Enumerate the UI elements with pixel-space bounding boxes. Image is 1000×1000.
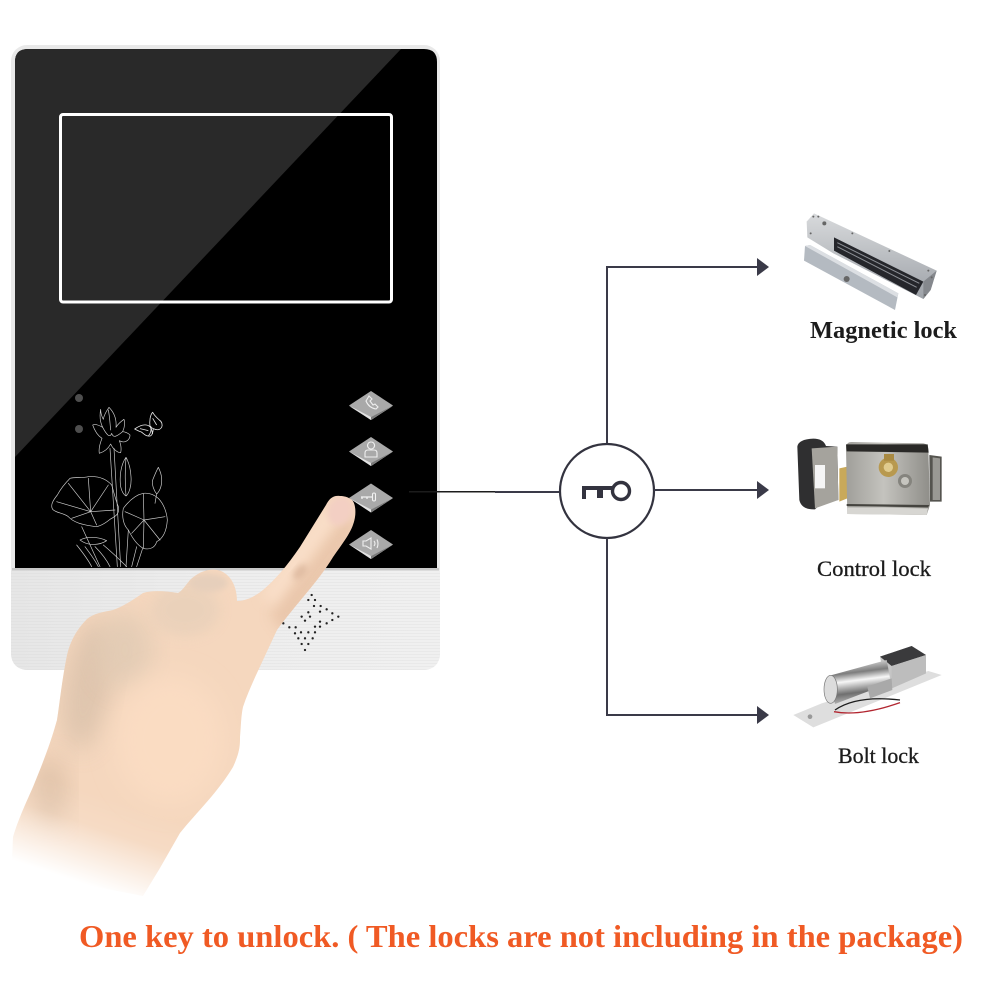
black glass front <box>15 49 437 568</box>
icon: control lock <box>797 439 942 515</box>
label: bolt lock: Bolt lock <box>838 743 919 768</box>
screen frame <box>60 114 392 302</box>
button: unlock key <box>349 484 393 512</box>
hand pressing the button <box>12 496 356 895</box>
control buttons <box>349 391 393 559</box>
arrow: to bolt lock <box>607 538 769 724</box>
monitor bezel <box>11 45 440 670</box>
label: control lock: Control lock <box>817 556 931 581</box>
panel: intercom monitor <box>11 45 440 670</box>
arrow: to magnetic lock <box>607 258 769 443</box>
label: magnetic lock: Magnetic lock <box>810 318 958 344</box>
glass reflection <box>15 49 401 457</box>
button: volume <box>349 530 393 559</box>
icon: key <box>582 482 630 500</box>
icon: magnetic lock <box>804 213 937 310</box>
speaker holes <box>282 594 339 651</box>
indicator lights <box>75 394 83 433</box>
caption: One key to unlock. ( The locks are not including in the package) <box>79 918 963 954</box>
connector: button to key circle <box>409 491 560 493</box>
key circle <box>560 444 654 538</box>
silver lower panel <box>11 570 440 670</box>
button: concierge <box>349 437 393 466</box>
button: answer <box>349 391 393 420</box>
butterfly decoration <box>135 412 162 436</box>
icon: bolt lock <box>793 646 942 727</box>
arrow: to control lock <box>654 481 769 499</box>
lotus flower decoration <box>52 407 167 567</box>
